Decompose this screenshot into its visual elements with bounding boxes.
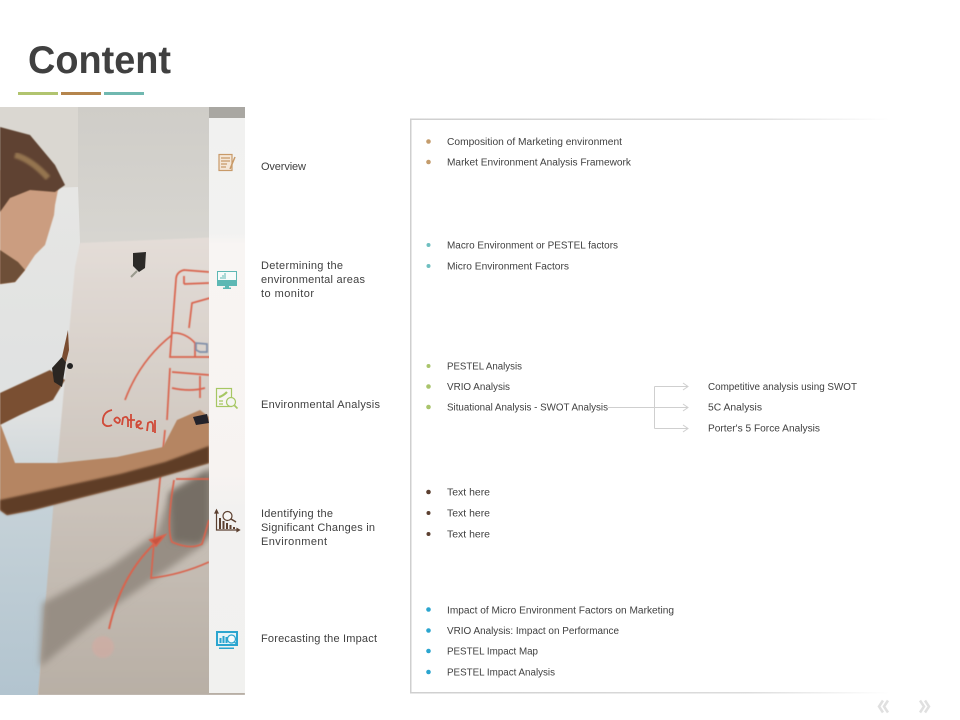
list: overview items: Composition of Marketing environment (447, 137, 622, 148)
icon: previous chevrons (879, 700, 888, 712)
icon: monitor with chart (217, 272, 237, 289)
list: monitoring items (426, 240, 618, 272)
panel: content frame (410, 118, 890, 694)
list: monitoring items: Macro Environment or PESTEL factors (447, 240, 618, 252)
title underline accents (18, 92, 144, 95)
section labels: environmental areas (261, 274, 366, 286)
list: text placeholders: Text here (447, 508, 490, 520)
section labels: Significant Changes in (261, 522, 375, 534)
list: analysis items: VRIO Analysis (447, 382, 510, 393)
icon: document with pencil (219, 154, 235, 170)
list: analysis items: Situational Analysis - SWOT Analysis (447, 402, 608, 414)
list: analysis items (426, 362, 608, 414)
list: SWOT sub-items: 5C Analysis (708, 402, 762, 414)
list: analysis items: PESTEL Analysis (447, 362, 522, 372)
section labels: to monitor (261, 288, 314, 300)
list: overview items (426, 137, 632, 168)
man: head (0, 170, 60, 284)
section labels: Determining the (261, 260, 343, 272)
section labels (261, 161, 380, 645)
section labels: Overview (261, 161, 306, 173)
icon: next chevrons (920, 700, 929, 712)
list: impact items: PESTEL Impact Analysis (447, 668, 555, 678)
list: text placeholders: Text here (447, 530, 490, 540)
list: text placeholders (426, 488, 490, 540)
list: impact items (426, 606, 674, 678)
icon: blue monitor with magnifier (216, 631, 238, 649)
list: text placeholders: Text here (447, 488, 490, 498)
connector arrows: SWOT branches (608, 383, 688, 432)
section labels: Environment (261, 536, 327, 548)
title: Content (28, 39, 171, 82)
section labels: Identifying the (261, 508, 333, 520)
list: impact items: Impact of Micro Environment Factors on Marketing (447, 606, 674, 616)
icon: bar chart with magnifier (215, 510, 240, 532)
section labels: Forecasting the Impact (261, 633, 377, 645)
icon: report with magnifier (216, 388, 238, 408)
photo: man writing on whiteboard (0, 107, 245, 695)
list: impact items: PESTEL Impact Map (447, 646, 538, 658)
list: impact items: VRIO Analysis: Impact on Performance (447, 626, 619, 637)
panel: left icon strip (209, 118, 245, 693)
list: SWOT sub-items: Porter's 5 Force Analysis (708, 424, 820, 434)
list: SWOT sub-items: Competitive analysis using SWOT (708, 382, 857, 393)
man: upper arm (0, 370, 65, 425)
list: SWOT sub-items (708, 382, 857, 434)
man: forearm (0, 410, 209, 515)
list: overview items: Market Environment Analysis Framework (447, 158, 632, 168)
list: monitoring items: Micro Environment Factors (447, 262, 569, 272)
section labels: Environmental Analysis (261, 399, 380, 411)
